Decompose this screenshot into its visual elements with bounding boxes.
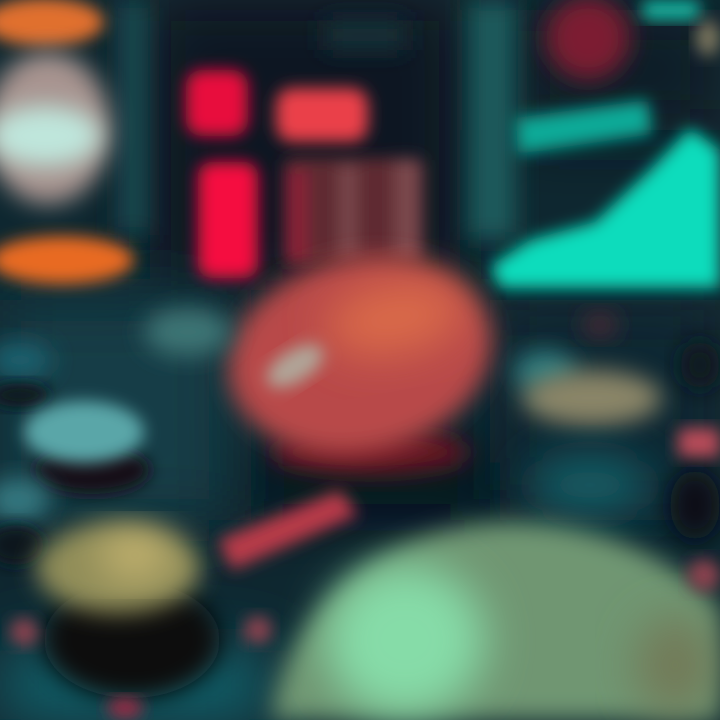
block: lower right muted — [284, 158, 424, 264]
block: upper right coral — [276, 88, 368, 142]
dish: teal base — [528, 455, 652, 515]
shape: teal mountain — [490, 128, 720, 288]
dish: dark lower left — [0, 525, 44, 565]
dish: beige top — [522, 370, 662, 426]
block: upper left red — [186, 70, 248, 136]
shape: sphere highlight — [0, 106, 101, 166]
bowl: yellow top — [36, 523, 200, 613]
right dish — [513, 313, 720, 540]
shape: top orange — [0, 0, 104, 46]
accent: pink right lower — [688, 559, 720, 591]
strip: pink — [678, 428, 720, 458]
dish: teal ellipse — [24, 401, 144, 463]
vertical teal columns — [118, 0, 516, 240]
dish: left edge — [0, 342, 52, 378]
dish: teal lower left — [0, 478, 50, 522]
shape: red circle — [546, 0, 630, 80]
spot: dark — [670, 470, 720, 540]
red blocks — [186, 70, 424, 278]
accent: pink left — [10, 618, 38, 646]
sphere: warm side — [635, 615, 715, 715]
left dishes — [0, 308, 272, 718]
sphere: body — [272, 522, 720, 720]
shape: orange strip — [0, 236, 134, 284]
block: lower left red — [198, 162, 258, 278]
shape: sphere — [0, 52, 110, 204]
dish: small grey-teal — [144, 308, 232, 356]
large green sphere — [272, 522, 720, 720]
shape: teal corner — [642, 0, 700, 20]
left stack — [0, 0, 134, 284]
plate: shadow — [270, 430, 470, 474]
dish: dark under teal — [34, 446, 150, 494]
bowl: black base — [44, 582, 220, 698]
plate: pale highlight — [259, 335, 331, 397]
plate: body — [210, 232, 510, 478]
accent: red bottom — [107, 698, 143, 718]
spot: dark right — [680, 341, 720, 389]
dish: teal rim — [513, 350, 577, 394]
central plate — [210, 232, 510, 478]
sphere: light side — [325, 564, 485, 716]
spot: red — [582, 313, 618, 337]
bowl: highlight — [99, 533, 171, 577]
red diagonal strip — [218, 490, 358, 570]
top right cluster — [490, 0, 720, 288]
shape: beige corner — [696, 20, 720, 56]
plate: orange glaze — [320, 270, 470, 366]
shape: teal strip — [516, 100, 652, 154]
accent: pink center — [244, 616, 272, 644]
dish: dark below edge — [0, 383, 50, 407]
